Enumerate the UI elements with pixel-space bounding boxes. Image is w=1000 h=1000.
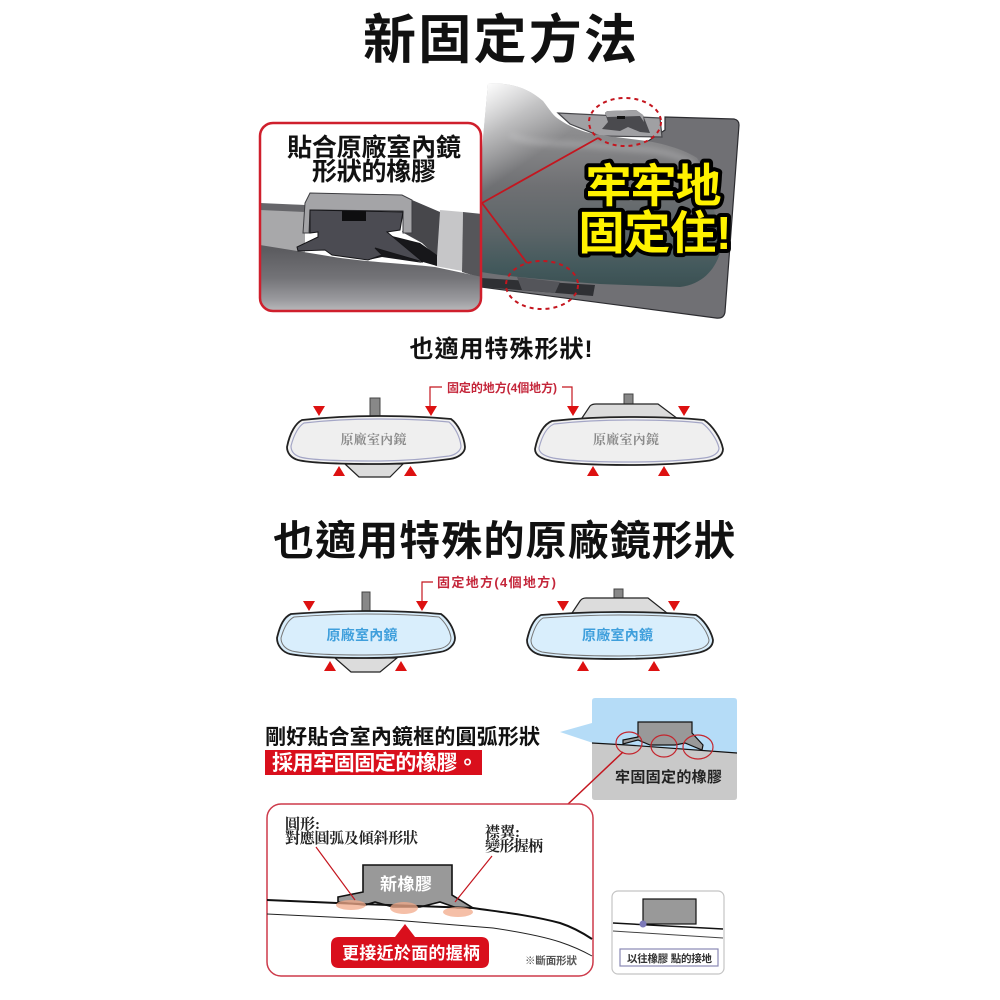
ridge highlight [510,135,695,165]
new rubber shape [338,865,473,908]
callout: rubber closeup inset: 形狀的橡膠 [312,158,436,186]
chrome strip [261,204,305,252]
text: arc fit description: 剛好貼合室內鏡框的圓弧形狀 [265,725,540,749]
rubber front [297,210,423,262]
section note: ※斷面形狀 [525,954,578,967]
title: 新固定方法 [363,11,637,70]
diagram: grey mirrors: 原廠室內鏡 [340,432,406,447]
diagram: blue mirrors [277,575,713,672]
panel: old rubber: 以往橡膠 點的接地 [627,952,712,965]
top clip [602,110,650,133]
yellow slogan [578,160,732,259]
left mirror [362,592,370,613]
fixing-point label: 固定地方(4個地方) [437,575,556,590]
right mirror [614,589,623,599]
callout: rubber closeup inset [260,123,482,312]
bottom slot [481,278,595,296]
dashed circles [506,98,661,309]
fixing-point label: 固定的地方(4個地方) [447,380,557,395]
flap annotation: 變形握柄 [484,837,543,855]
leader lines [316,847,492,902]
panel: rubber cross-section [560,698,737,800]
bottom clip [517,277,560,293]
mirror body [481,84,721,287]
inset caption: 貼合原廠室內鏡 [287,133,461,162]
back plate [481,117,739,318]
photo: rear-view mirror with mounting plate [481,84,739,318]
top frame [558,113,662,137]
rubber shadow [370,236,437,266]
leader line to detail panel [567,752,623,805]
leader lines from inset [482,138,598,263]
flap annotation: 襟翼: [485,824,520,841]
diagram: grey mirrors [287,380,723,477]
right mirror [624,394,633,405]
yellow slogan: 固定住! [578,207,732,259]
round annotation [285,816,419,847]
panel: new rubber detail: 新橡膠 [380,874,432,894]
left mirror [370,398,380,417]
right block [435,210,463,271]
top-left fade [481,84,721,287]
diagram: grey mirrors: 原廠室內鏡 [593,432,659,447]
red triangles [313,406,690,476]
heading: special OEM mirror shapes: 也適用特殊的原廠鏡形狀 [273,518,735,564]
lower body [260,245,482,312]
panel: new rubber detail [267,804,593,976]
diagram: blue mirrors: 原廠室內鏡 [326,627,398,643]
red triangles [303,601,680,671]
rubber flank [402,200,440,257]
heading: special shapes: 也適用特殊形狀! [410,335,592,363]
red callout [331,924,489,968]
panel: rubber cross-section: 牢固固定的橡膠 [615,768,722,786]
rubber cap [303,193,412,233]
red banner: 採用牢固固定的橡膠。 [272,751,478,775]
surface curves [267,900,592,939]
panel: old rubber [612,891,724,974]
yellow slogan: 牢牢地 [586,160,722,212]
slot [342,211,366,221]
panel: new rubber detail: 更接近於面的握柄 [342,943,480,963]
diagram: blue mirrors: 原廠室內鏡 [582,627,653,643]
round annotation: 圓形: [285,816,320,833]
contact highlights [336,900,473,917]
round annotation: 對應圓弧及傾斜形狀 [285,829,419,847]
flap annotation [484,824,543,855]
